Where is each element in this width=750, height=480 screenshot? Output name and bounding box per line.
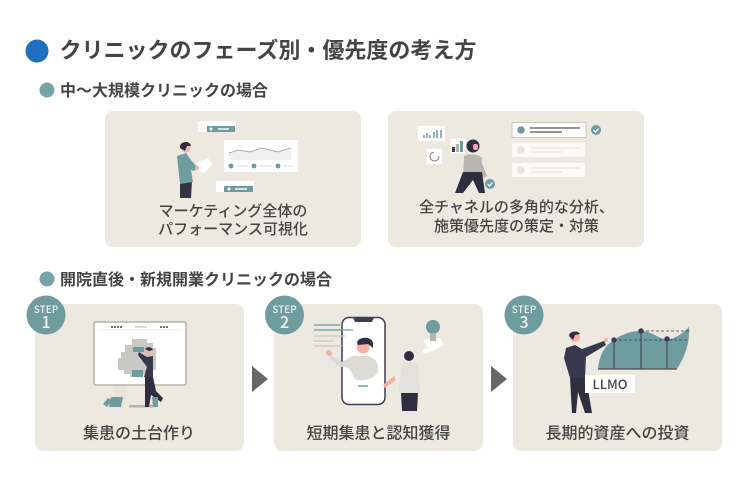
panel: step 3 xyxy=(504,296,722,451)
step badge 1 xyxy=(26,296,66,334)
arrow: step 1 to step 2 xyxy=(252,366,268,392)
panel: step 1: 集患の土台作り xyxy=(83,420,195,444)
step badge 2: STEP xyxy=(272,301,297,316)
icon: analyst with checklist xyxy=(418,122,601,193)
arrow: step 2 to step 3 xyxy=(491,366,507,392)
panel: multi-channel analysis: 全チャネルの多角的な分析、 xyxy=(419,196,614,217)
panel: multi-channel analysis: 施策優先度の策定・対策 xyxy=(434,215,599,236)
step badge 1: STEP xyxy=(34,301,59,316)
panel: step 3: 長期的資産への投資 xyxy=(545,420,690,444)
label: LLMO: LLMO xyxy=(592,374,628,393)
heading: mid-to-large clinics: 中〜大規模クリニックの場合 xyxy=(60,77,268,101)
panel: step 1 xyxy=(26,296,244,451)
panel: step 2 xyxy=(265,296,483,451)
step badge 1: 1 xyxy=(41,309,51,333)
heading: newly opened clinics: 開院直後・新規開業クリニックの場合 xyxy=(60,266,332,290)
panel: step 2: 短期集患と認知獲得 xyxy=(306,420,451,444)
step badge 3 xyxy=(504,296,544,334)
panel: marketing visualization xyxy=(105,111,361,247)
step badge 2 xyxy=(265,296,304,334)
icon: smartphone and customer xyxy=(314,318,444,411)
step badge 3: 3 xyxy=(519,309,529,333)
step badge 2: 2 xyxy=(280,309,289,333)
panel: marketing visualization: マーケティング全体の xyxy=(159,200,307,221)
title: クリニックのフェーズ別・優先度の考え方 xyxy=(60,33,476,65)
step badge 3: STEP xyxy=(512,301,537,316)
panel: multi-channel analysis xyxy=(388,111,644,247)
panel: marketing visualization: パフォーマンス可視化 xyxy=(158,218,308,239)
icon: dashboard and person reading xyxy=(177,121,298,198)
icon: growth chart and presenter xyxy=(564,327,689,413)
icon: building a website xyxy=(94,322,186,408)
